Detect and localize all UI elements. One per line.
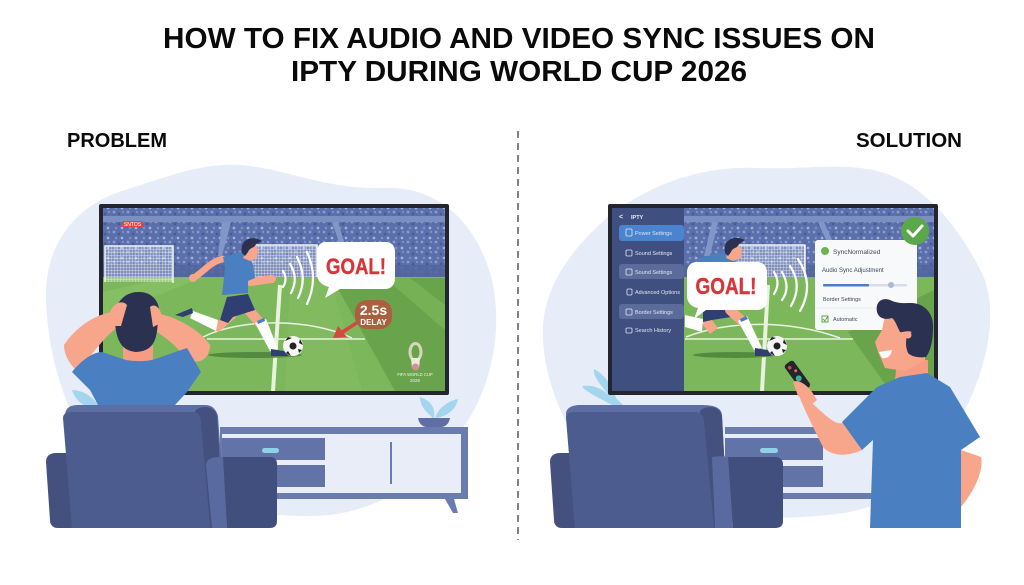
title	[163, 23, 875, 88]
ball	[283, 336, 303, 356]
sound waves	[774, 259, 807, 311]
pitch markings	[203, 285, 365, 391]
settings sidebar: Search History	[635, 328, 671, 334]
plant	[418, 397, 458, 427]
settings sidebar: Border Settings	[635, 310, 673, 316]
tournament logo: 2026	[410, 378, 421, 383]
settings sidebar: Sound Settings	[635, 251, 673, 257]
player	[175, 238, 303, 358]
armchair	[46, 405, 277, 528]
sync settings card: Border Settings	[823, 297, 861, 303]
heading: solution: SOLUTION	[856, 130, 962, 152]
television	[99, 204, 449, 395]
goal center	[250, 245, 317, 277]
settings sidebar	[612, 208, 684, 391]
delay badge	[333, 300, 392, 338]
title: HOW TO FIX AUDIO AND VIDEO SYNC ISSUES ON	[163, 23, 875, 55]
plant	[582, 369, 623, 405]
tournament logo: FIFA WORLD CUP	[397, 372, 433, 377]
player	[685, 238, 787, 358]
speech bubble: goal: GOAL!	[696, 273, 756, 299]
speech bubble: goal	[317, 242, 395, 298]
divider between panels	[517, 131, 519, 540]
screen: football match	[612, 208, 934, 391]
delay badge: DELAY	[360, 318, 387, 327]
broadcast tag	[122, 221, 143, 227]
heading: problem: PROBLEM	[67, 130, 167, 152]
ball	[767, 336, 787, 356]
pitch markings	[685, 285, 853, 391]
person: man with remote	[784, 299, 982, 528]
armchair	[550, 405, 783, 528]
settings sidebar: Sound Settings	[635, 270, 673, 276]
goal left	[105, 246, 173, 283]
speech bubble: goal	[687, 262, 767, 319]
sync settings card	[815, 240, 917, 330]
settings sidebar: Advanced Options	[635, 290, 680, 296]
tv stand	[725, 427, 875, 499]
television	[608, 204, 938, 395]
success check badge	[901, 217, 929, 245]
remote	[784, 360, 811, 392]
panel: solution	[543, 167, 990, 528]
background blob	[46, 165, 496, 516]
background blob	[543, 167, 990, 518]
sync settings card: Audio Sync Adjustment	[822, 268, 884, 274]
panel: problem	[46, 165, 496, 528]
screen: football match	[103, 208, 445, 391]
speech bubble: goal: GOAL!	[326, 254, 386, 279]
person: frustrated viewer	[64, 292, 210, 405]
settings sidebar: <	[619, 214, 623, 221]
tv stand	[220, 427, 468, 513]
small plant behind person	[72, 390, 98, 405]
sync settings card: SyncNormalized	[833, 249, 881, 256]
broadcast tag: SNTOS	[124, 222, 142, 228]
tournament logo	[397, 344, 433, 383]
sync settings card: Automatic	[833, 317, 858, 323]
delay badge: 2.5s	[360, 302, 387, 318]
title: IPTY DURING WORLD CUP 2026	[291, 56, 747, 88]
sound waves	[283, 252, 313, 304]
settings sidebar: IPTY	[631, 215, 644, 221]
goal	[732, 245, 805, 277]
settings sidebar: Power Settings	[635, 231, 672, 237]
